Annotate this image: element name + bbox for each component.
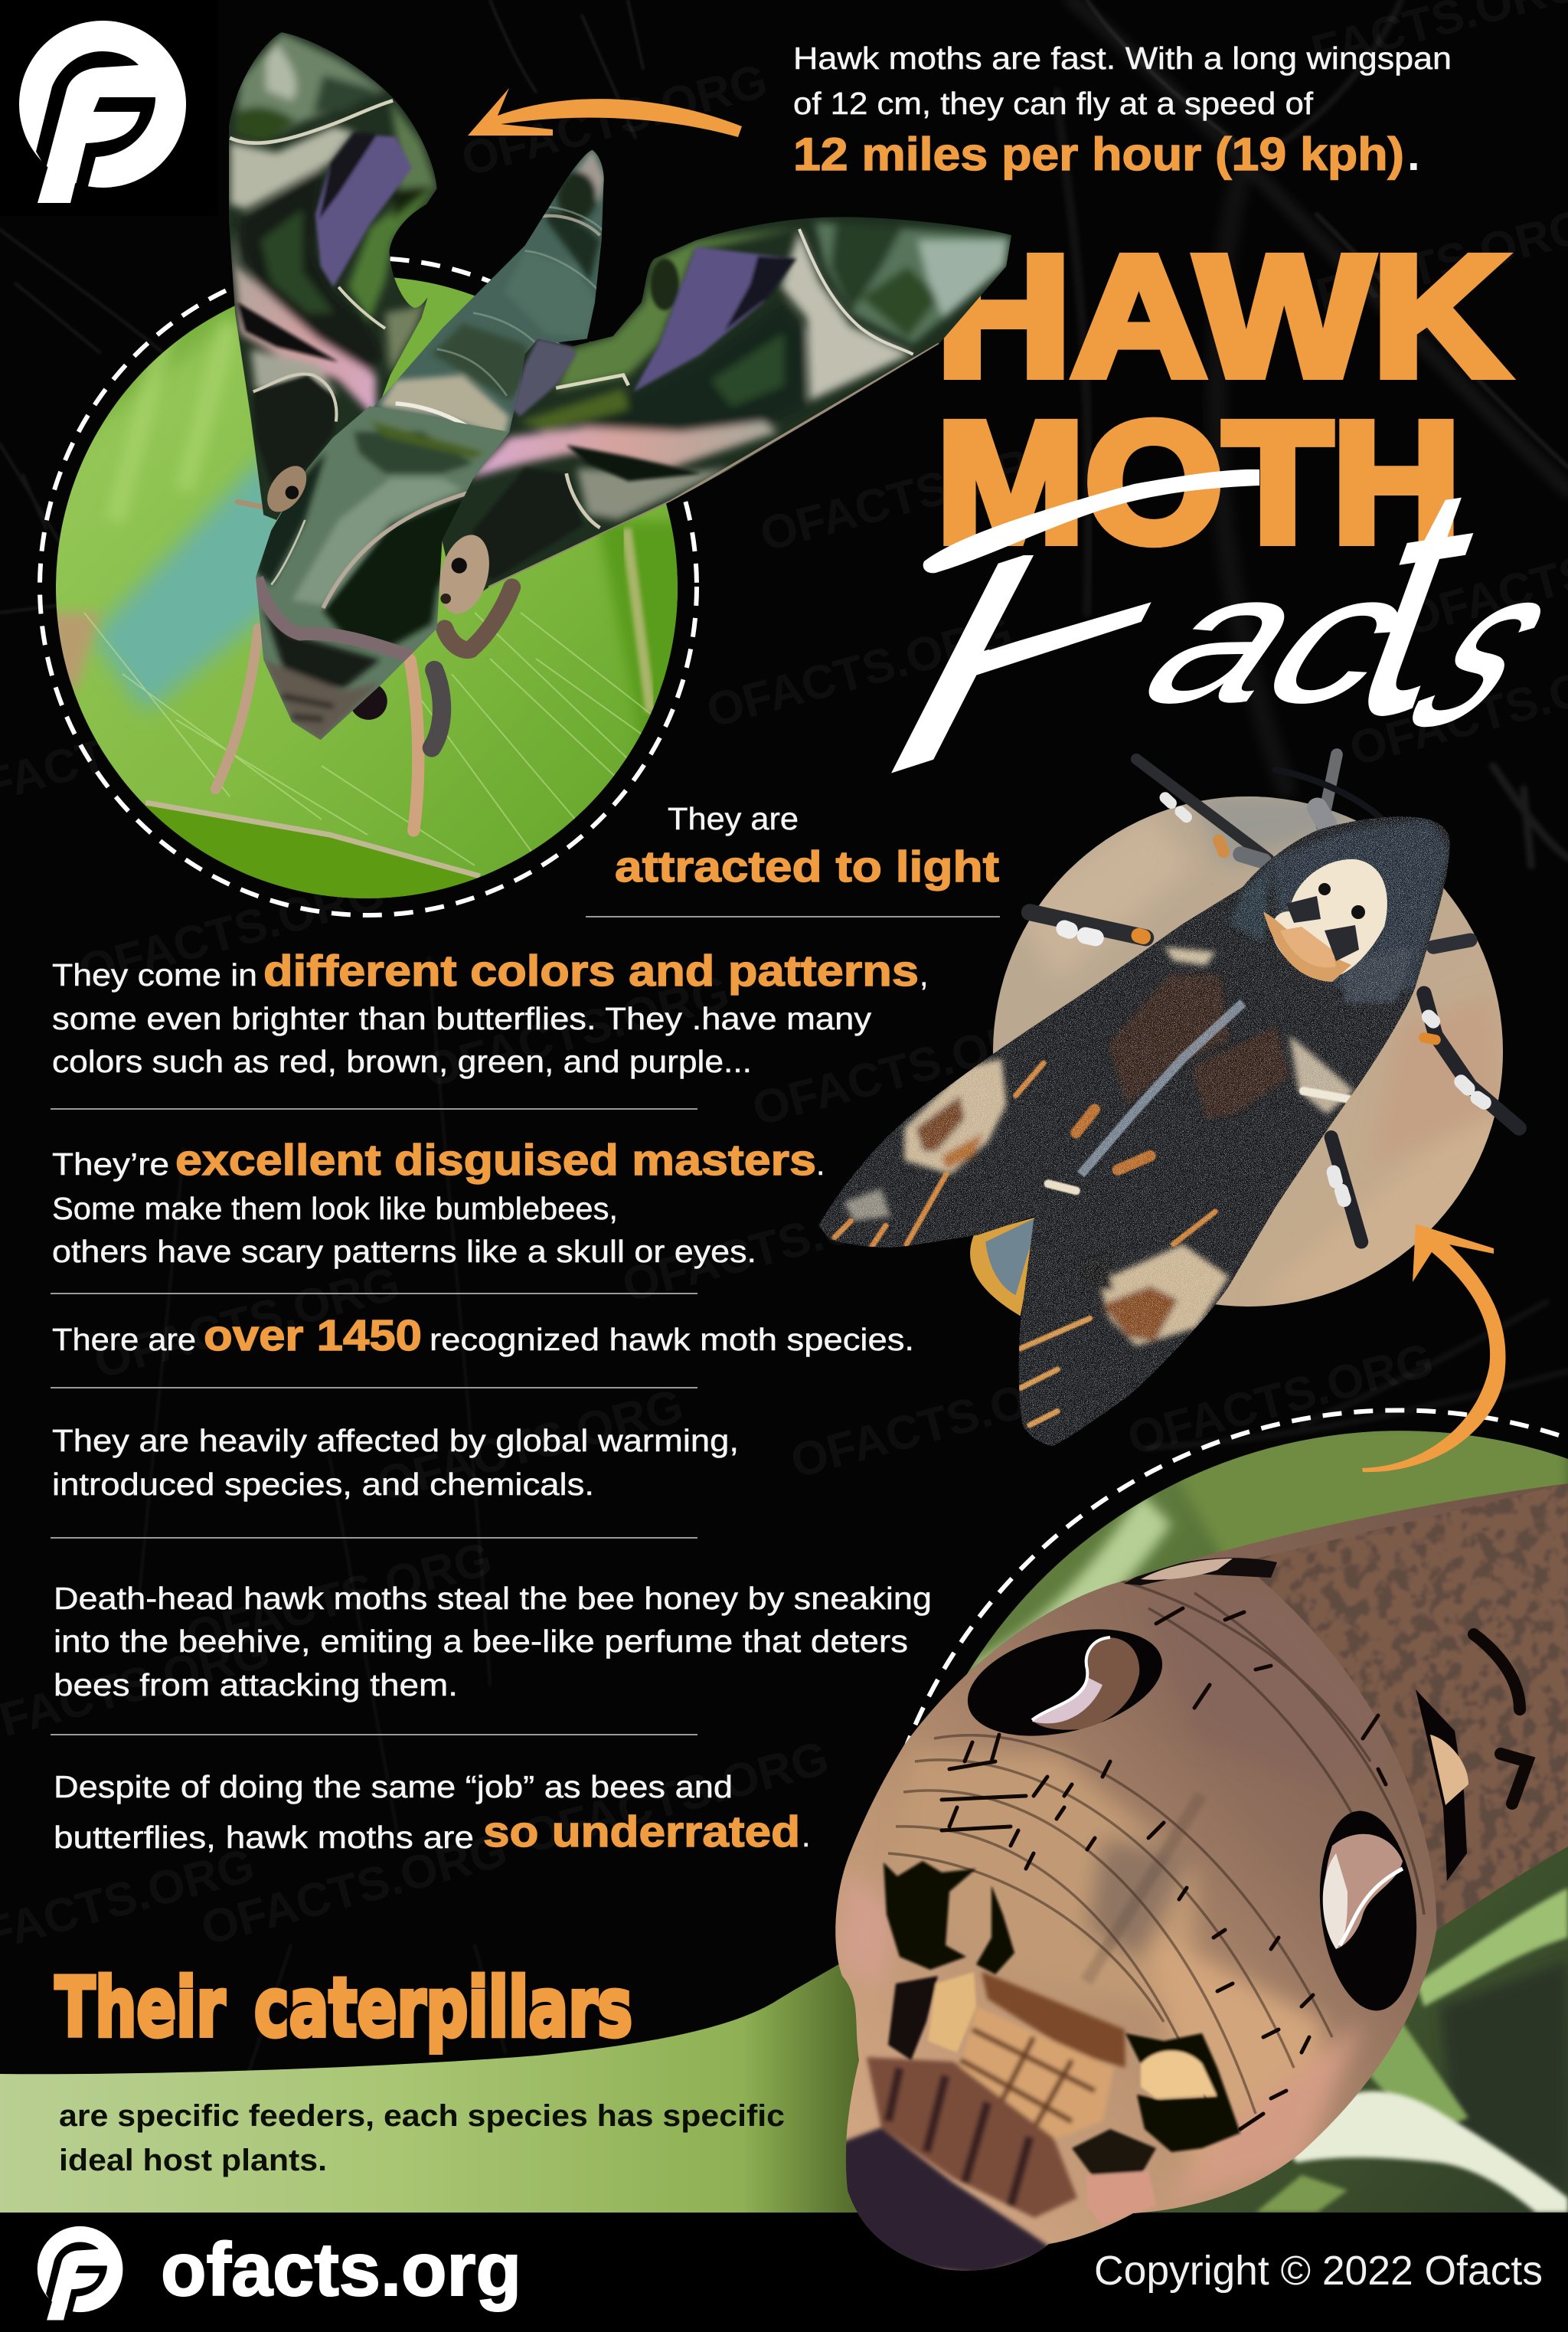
logo top block — [0, 0, 218, 216]
fact: disguise: Some make them look like bumblebees, — [52, 1191, 618, 1226]
fact: colors and patterns: , — [920, 957, 928, 993]
eye spot right — [1311, 1806, 1426, 2016]
black bar by spot — [976, 1886, 1014, 1974]
footer site name: ofacts.org — [161, 2227, 521, 2311]
headline top fact: . — [1407, 129, 1420, 180]
background watermarks: OFACTS.ORG — [456, 54, 773, 187]
fact: underrated: . — [802, 1818, 810, 1853]
panel: caterpillar background and footer stem — [0, 1410, 1568, 2213]
footer bar — [0, 2213, 1568, 2332]
fact: underrated: butterflies, hawk moths are — [54, 1820, 474, 1855]
title Facts script: t — [1314, 408, 1523, 791]
title HAWK: HAWK — [936, 221, 1508, 412]
wing midline — [1080, 1002, 1243, 1175]
fact: underrated: Despite of doing the same “job” as bees and — [54, 1769, 733, 1804]
moth wings — [812, 808, 1461, 1457]
panel: green leaf circle photo — [40, 258, 697, 915]
fact: threats — [51, 1423, 739, 1539]
eye spot upper back — [1124, 1558, 1277, 1585]
leaf photo — [46, 260, 689, 911]
black tick marks — [942, 1608, 1386, 2129]
title Facts script — [891, 498, 1540, 774]
fact: colors and patterns — [51, 947, 928, 1110]
body ribs — [888, 1578, 1424, 2129]
legs and feelers — [215, 502, 512, 831]
fact: species count: over 1450 — [204, 1311, 422, 1360]
fact: honey thieves: Death-head hawk moths steal the bee honey by sneaking — [54, 1581, 932, 1616]
eye spot right — [431, 529, 498, 620]
background watermarks: OFACTS.ORG — [1122, 1333, 1439, 1466]
head soft shading — [838, 1593, 1401, 2206]
fact: underrated: so underrated — [483, 1807, 800, 1856]
fact: attracted to light: attracted to light — [615, 842, 999, 891]
background watermarks: OFACTS.ORG — [518, 1732, 835, 1864]
pale skull tooth — [1141, 2050, 1217, 2098]
purple patch right — [473, 247, 796, 580]
background watermarks: OFACTS.ORG — [701, 606, 1018, 738]
dashed ring — [40, 258, 697, 915]
caterpillars text: ideal host plants. — [59, 2144, 327, 2177]
blurred foliage photo — [888, 1424, 1568, 2213]
footer — [0, 2213, 1568, 2332]
arrow: moth to caterpillar — [1362, 1224, 1505, 1472]
moth group scaled — [812, 754, 1519, 1457]
black skull spot left — [884, 1861, 976, 1970]
black bars below spot — [888, 1976, 938, 2060]
orange hindwing — [970, 1216, 1039, 1316]
background watermarks: OFACTS.ORG — [89, 1257, 406, 1389]
legs and antenna — [1030, 754, 1519, 1241]
background watermarks: OFACTS.ORG — [755, 430, 1072, 562]
headline top fact: 12 miles per hour (19 kph) — [793, 129, 1404, 180]
mottled back — [1240, 1478, 1568, 1938]
title Facts script: F — [825, 425, 1259, 848]
rock circle — [988, 789, 1508, 1310]
background watermarks: OFACTS.ORG — [372, 1379, 689, 1512]
title brush strike — [923, 469, 1259, 573]
thorax and head — [250, 401, 514, 747]
headline top fact: of 12 cm, they can fly at a speed of — [793, 86, 1314, 121]
arrow: top to moth — [468, 88, 742, 137]
blue hindwing patch — [985, 1216, 1039, 1295]
fact: disguise: others have scary patterns like a skull or eyes. — [52, 1234, 756, 1269]
skin — [827, 1478, 1568, 2275]
headline top fact: Hawk moths are fast. With a long wingspan — [793, 41, 1452, 76]
fact: species count: There are — [52, 1322, 196, 1357]
caterpillars heading: caterpillars — [254, 1961, 632, 2055]
fact: disguise: They’re — [52, 1146, 169, 1182]
fact: attracted to light — [586, 801, 1000, 917]
mouth cells lower — [957, 2007, 1114, 2144]
plant band — [0, 1953, 873, 2213]
black and pale skull marks — [884, 1861, 1240, 2225]
right wing — [432, 209, 1017, 613]
background watermarks: OFACTS.ORG — [181, 1532, 498, 1665]
fact: colors and patterns: different colors and patterns — [263, 947, 919, 996]
fact: disguise: . — [816, 1146, 825, 1182]
caterpillars text: are specific feeders, each species has specific — [59, 2099, 785, 2133]
fact: disguise: excellent disguised masters — [175, 1136, 816, 1185]
abdomen — [374, 150, 604, 432]
pale skull cells — [928, 1972, 976, 2052]
dashed arc — [903, 1410, 1568, 1754]
black skull spot right — [1125, 2033, 1240, 2152]
fact: honey thieves: bees from attacking them. — [54, 1667, 458, 1702]
background watermarks: OFACTS.ORG — [786, 1356, 1102, 1489]
title — [825, 221, 1568, 848]
pink lip — [1086, 2171, 1156, 2225]
mouth stripes upper — [982, 1971, 1125, 2068]
headline top fact — [793, 41, 1452, 180]
background watermarks: OFACTS.ORG — [617, 1180, 934, 1313]
logo black backing — [0, 0, 218, 216]
fact: species count: recognized hawk moth species. — [430, 1322, 914, 1357]
caterpillars text — [59, 2099, 785, 2177]
wing fold tuft — [512, 339, 577, 417]
background watermarks: OFACTS.ORG — [196, 1823, 513, 1956]
caterpillars heading — [55, 1961, 632, 2055]
eye spot left — [260, 459, 315, 519]
panel: death's head moth — [812, 754, 1519, 1457]
caterpillar — [827, 1478, 1568, 2275]
background watermarks: OFACTS.ORG — [747, 1004, 1064, 1137]
footer copyright: Copyright © 2022 Ofacts — [1094, 2248, 1543, 2294]
background watermarks: OFACTS.ORG — [418, 966, 735, 1098]
fact: threats: They are heavily affected by global warming, — [52, 1423, 739, 1458]
fact: colors and patterns: colors such as red, brown, green, and purple... — [52, 1044, 752, 1079]
lower smudge — [1072, 2129, 1156, 2179]
title Facts script: ac — [1101, 535, 1468, 741]
purple patch left — [237, 132, 412, 484]
fact: underrated — [54, 1769, 810, 1856]
mandible — [867, 2057, 1077, 2218]
hawk moth photo — [214, 23, 1017, 831]
faint cross band — [1086, 1795, 1201, 1981]
eye spot side — [1416, 1689, 1468, 1881]
left wing — [229, 32, 436, 520]
chin — [842, 2128, 1057, 2275]
logo mark — [19, 21, 186, 207]
fact: threats: introduced species, and chemicals. — [52, 1467, 594, 1502]
fact: honey thieves: into the beehive, emiting a bee-like perfume that deters — [54, 1624, 908, 1659]
fact: colors and patterns: They come in — [52, 957, 257, 993]
fact: disguise — [51, 1136, 825, 1294]
mouth and mandible, soft edges — [842, 1971, 1125, 2275]
wing streaks — [835, 1063, 1354, 1425]
fact: attracted to light: They are — [668, 801, 799, 836]
caterpillars heading: Their — [55, 1961, 225, 2055]
fact: honey thieves — [51, 1581, 932, 1735]
background watermarks: OFACTS.ORG — [74, 866, 390, 999]
title MOTH: MOTH — [936, 387, 1461, 578]
footer logo — [38, 2226, 122, 2322]
speckle scales — [812, 808, 1461, 1457]
fact: species count — [51, 1311, 914, 1388]
eye spot top — [956, 1611, 1174, 1755]
skull mark — [1263, 859, 1387, 982]
fact: colors and patterns: some even brighter than butterflies. They .have many — [52, 1001, 872, 1036]
back black marks — [1474, 1634, 1527, 1804]
